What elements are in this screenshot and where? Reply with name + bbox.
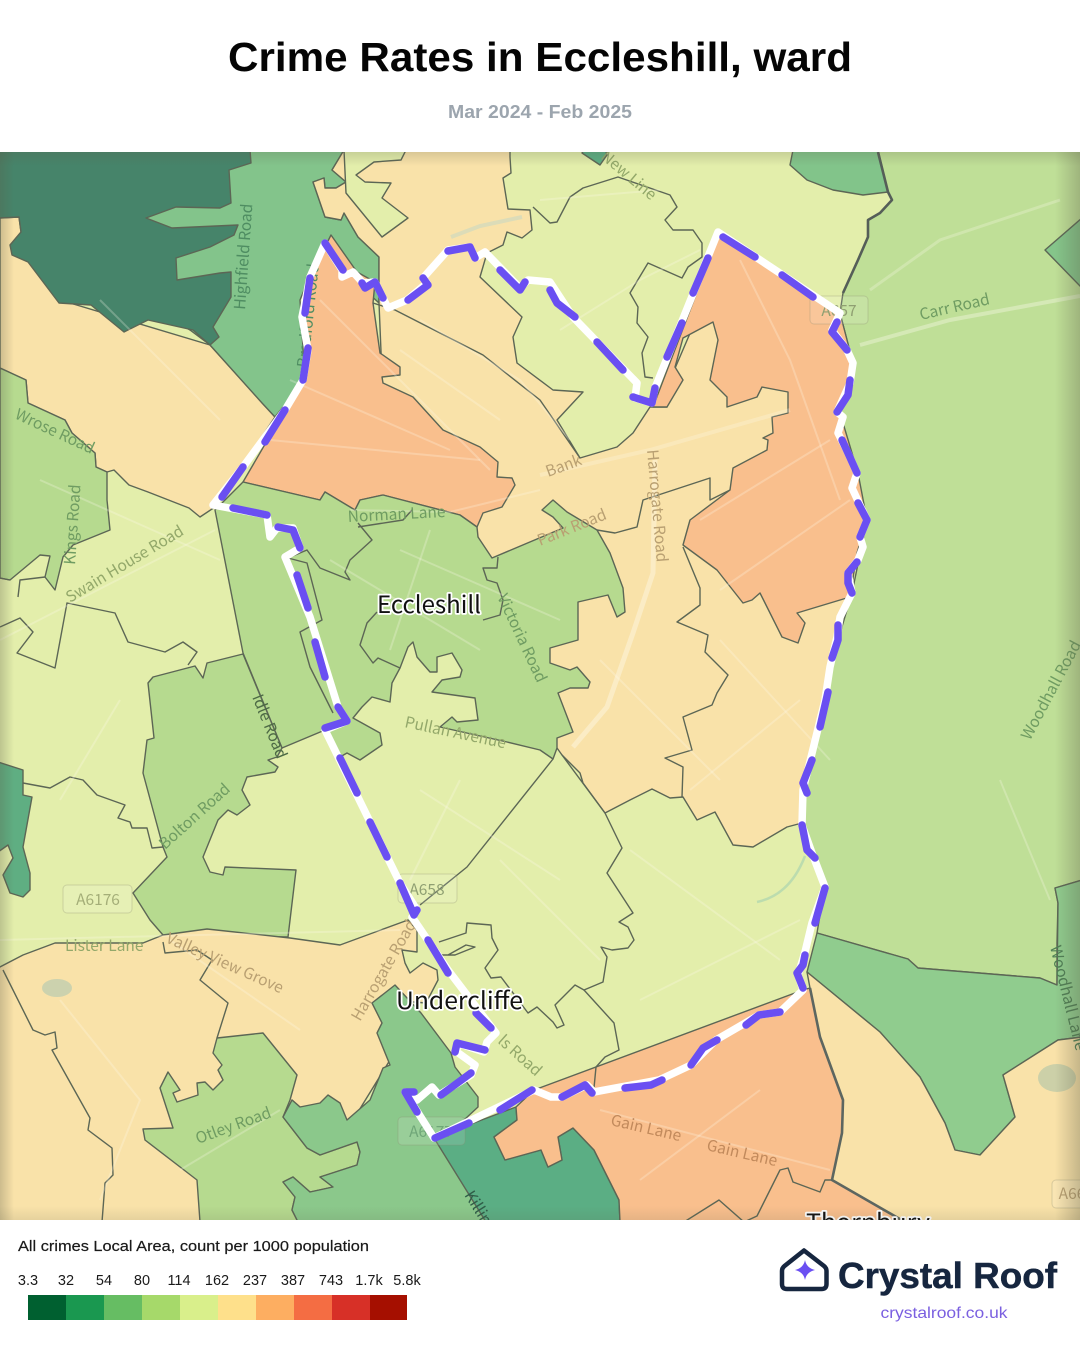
road name labels: Bradford Road: [291, 262, 324, 369]
legend title: All crimes Local Area, count per 1000 population: [18, 1239, 369, 1255]
legend scale values: 32: [58, 1273, 74, 1289]
legend scale values: 237: [243, 1273, 267, 1289]
icon: house with sparkle: [782, 1250, 826, 1289]
legend scale values: 387: [281, 1273, 305, 1289]
Crystal Roof logo: [782, 1250, 1058, 1322]
road name labels: Valley View Grove: [163, 926, 287, 998]
legend scale values: 1.7k: [355, 1273, 383, 1289]
road name labels: Highfield Road: [228, 203, 257, 310]
road number shields: A657: [821, 299, 857, 321]
legend scale values: [18, 1273, 421, 1289]
legend scale values: 162: [205, 1273, 229, 1289]
legend scale values: 80: [134, 1273, 150, 1289]
road name labels: Lister Lane: [65, 934, 143, 956]
road name labels: Harrogate Road: [345, 916, 421, 1024]
road number shields: A6176: [76, 888, 120, 910]
boundary purple dashes: [222, 237, 867, 1138]
road name labels: Harrogate Road: [642, 449, 674, 563]
road name labels: Killinghall Road: [460, 1186, 538, 1294]
road name labels: Idle Road: [247, 691, 293, 762]
road name labels: New Line: [597, 145, 662, 205]
legend scale values: 5.8k: [393, 1273, 421, 1289]
road name labels: Swain House Road: [61, 519, 187, 607]
map regions shaded by crime rate: [0, 148, 1080, 1222]
place label: Eccleshill: Eccleshill: [377, 585, 481, 620]
website url: crystalroof.co.uk: [880, 1305, 1009, 1322]
road number shields: A6177: [409, 1120, 453, 1142]
legend: [18, 1239, 421, 1320]
local area boundary lines: [0, 152, 905, 1222]
road name labels: Park Road: [534, 503, 610, 551]
road name labels: ls Road: [494, 1029, 547, 1081]
place label: Undercliffe: Undercliffe: [396, 981, 523, 1016]
road name labels: Gain Lane: [705, 1133, 780, 1171]
road number shields: [63, 296, 1080, 1208]
subtitle: date range: Mar 2024 - Feb 2025: [448, 102, 632, 122]
ward boundary: Eccleshill: [213, 232, 867, 1138]
road name labels: Victoria Road: [492, 590, 553, 686]
legend scale values: 3.3: [18, 1273, 38, 1289]
road name labels: Bolton Road: [154, 778, 235, 854]
street network: [0, 190, 1080, 1200]
legend scale values: 743: [319, 1273, 343, 1289]
road name labels: Pullan Avenue: [403, 710, 508, 753]
lakes and water features: [42, 217, 1076, 1092]
road name labels: Bank: [542, 448, 585, 482]
boundary white casing: [213, 232, 867, 1138]
road name labels: Kings Road: [58, 484, 86, 565]
title: Crime Rates in Eccleshill, ward: [228, 34, 852, 80]
road name labels: Otley Road: [192, 1101, 274, 1149]
road number shields: A658: [409, 878, 445, 900]
legend colour bar: [28, 1295, 407, 1320]
legend scale values: 54: [96, 1273, 112, 1289]
road name labels: Carr Road: [917, 287, 992, 325]
road name labels: Wrose Road: [12, 403, 99, 459]
road name labels: Norman Lane: [347, 500, 446, 527]
legend scale values: 114: [167, 1273, 191, 1289]
road name labels: Gain Lane: [609, 1108, 684, 1146]
brand name: Crystal Roof: [838, 1255, 1058, 1296]
place label: Thornbury: Thornbury: [806, 1203, 931, 1238]
